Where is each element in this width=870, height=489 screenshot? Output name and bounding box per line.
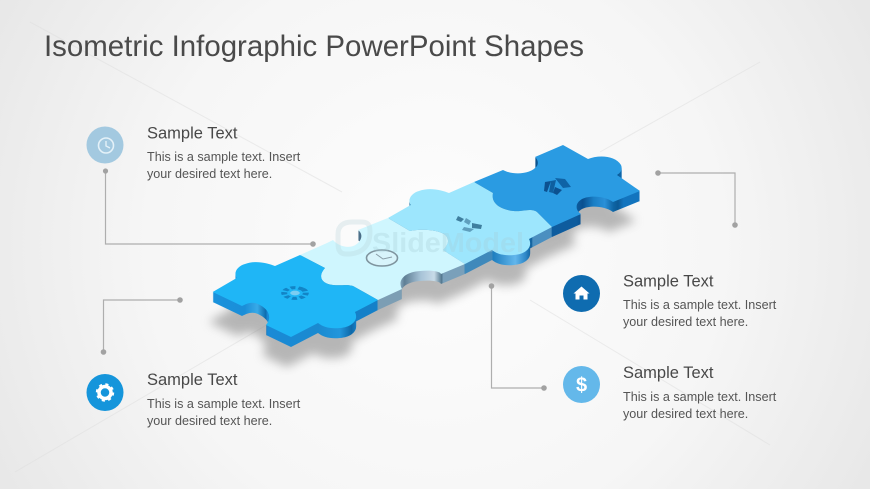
connector: home (655, 170, 738, 228)
icon: dollar badge: $ (576, 374, 587, 396)
icon: engraved home (544, 178, 571, 195)
callout: clock (86, 124, 301, 181)
body text: your desired text here. (147, 414, 272, 428)
puzzle shadow (209, 175, 636, 367)
watermark: SlideModel (372, 227, 524, 258)
icon: engraved clock (366, 250, 398, 266)
callout: gear (86, 371, 301, 428)
puzzle piece 4 top (474, 145, 640, 227)
puzzle piece 1 top (213, 255, 378, 337)
body text: This is a sample text. Insert (623, 390, 777, 404)
heading: Sample Text (147, 371, 238, 389)
icon: clock badge (86, 126, 124, 164)
puzzle piece 2 top (300, 218, 465, 300)
callout: dollar (563, 364, 777, 421)
body text: This is a sample text. Insert (147, 397, 301, 411)
body text: your desired text here. (147, 167, 272, 181)
heading: Sample Text (623, 272, 714, 290)
body text: your desired text here. (623, 315, 748, 329)
puzzle side walls (213, 146, 640, 347)
heading: Sample Text (147, 124, 238, 142)
icon: gear badge (86, 374, 124, 411)
icon: engraved gear (280, 285, 310, 301)
puzzle chain (209, 145, 640, 367)
connector: dollar (489, 283, 547, 391)
body text: This is a sample text. Insert (147, 150, 301, 164)
watermark (338, 222, 524, 258)
icon: home badge (563, 275, 600, 312)
puzzle piece 3 top (388, 182, 552, 264)
connector: clock (103, 168, 316, 247)
connector: gear (101, 297, 183, 355)
body text: This is a sample text. Insert (623, 298, 777, 312)
heading: Sample Text (623, 364, 714, 382)
body text: your desired text here. (623, 407, 748, 421)
callout: home (563, 272, 777, 329)
icon: engraved dollar (456, 216, 482, 232)
title: Isometric Infographic PowerPoint Shapes (44, 30, 584, 63)
icon: dollar badge (563, 366, 600, 403)
